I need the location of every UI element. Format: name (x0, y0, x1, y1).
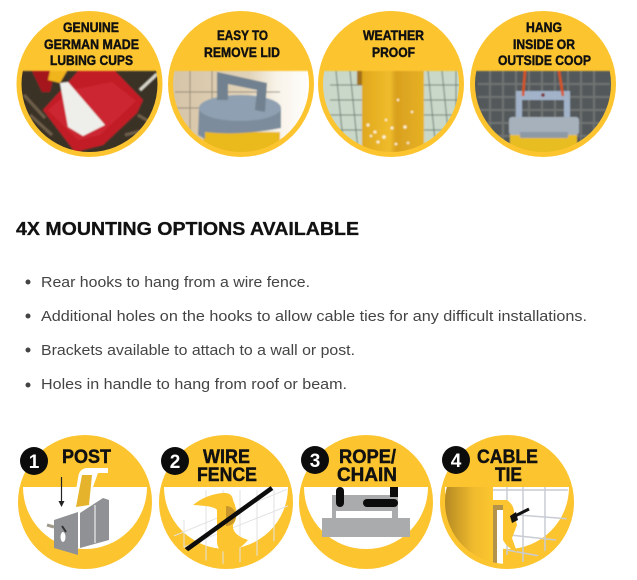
label: hang inside or outside coop: INSIDE OR (513, 37, 575, 52)
panel: feature weather proof (318, 11, 464, 157)
label: easy to remove lid (204, 28, 280, 60)
number badge 1: 1 (29, 452, 40, 473)
label: genuine German made lubing cups: GENUINE (63, 20, 119, 35)
label: weather proof (363, 28, 424, 60)
panel: mounting option 4 cable tie (440, 435, 574, 572)
icon: hook on wire fence (174, 486, 288, 564)
icon: hook sliding onto bracket (47, 468, 109, 555)
photo: red lubing cup (22, 70, 158, 152)
panel: mounting option 3 rope or chain (299, 435, 433, 569)
photo: wet yellow post against mesh (320, 71, 462, 156)
number badge 4: 4 (451, 451, 462, 472)
label: cable tie: CABLE (477, 447, 538, 468)
label: wire fence: WIRE (203, 447, 250, 468)
label: rope / chain (337, 447, 397, 486)
label: post: POST (62, 447, 111, 468)
label: cable tie (477, 447, 538, 486)
label: genuine German made lubing cups (44, 20, 139, 68)
panel: mounting option 1 post (18, 435, 152, 569)
photo: feeder hanging by orange rope (472, 71, 614, 156)
label: easy to remove lid: REMOVE LID (204, 45, 280, 60)
label: genuine German made lubing cups: LUBING CUPS (50, 53, 133, 68)
label: wire fence (197, 447, 257, 486)
photo: grey lid with handle (170, 71, 312, 156)
label: rope / chain: ROPE/ (339, 447, 397, 468)
label: easy to remove lid: EASY TO (217, 28, 268, 43)
label: hang inside or outside coop: OUTSIDE COOP (498, 53, 591, 68)
bullet list: mounting details: Additional holes on the hooks to allow cable ties for any difficult installations. (41, 309, 587, 325)
label: cable tie: TIE (495, 465, 522, 486)
label: weather proof: PROOF (372, 45, 415, 60)
bullet list: mounting details: Rear hooks to hang from a wire fence. (41, 275, 310, 291)
label: hang inside or outside coop: HANG (526, 20, 562, 35)
label: wire fence: FENCE (197, 465, 257, 486)
label: weather proof: WEATHER (363, 28, 424, 43)
bullet list: mounting details: Brackets available to attach to a wall or post. (41, 343, 355, 359)
label: genuine German made lubing cups: GERMAN MADE (44, 37, 139, 52)
label: rope / chain: CHAIN (337, 465, 397, 486)
panel: feature hang inside or outside coop (470, 11, 616, 157)
panel: feature easy to remove lid (168, 11, 314, 157)
icon: down arrow (58, 477, 64, 507)
panel: feature genuine German made lubing cups (15, 11, 165, 157)
icon: handle with rope and chain (322, 487, 410, 537)
panel: mounting option 2 wire fence (159, 435, 293, 570)
bullet list: mounting details: Holes in handle to hang from roof or beam. (41, 377, 347, 393)
icon: feeder hook with cable tie on fence (445, 487, 568, 564)
label: hang inside or outside coop (498, 20, 591, 68)
number badge 3: 3 (310, 451, 320, 472)
number badge 2: 2 (170, 452, 180, 473)
heading: mounting options: 4X MOUNTING OPTIONS AVAILABLE (16, 219, 359, 239)
bullet list: mounting details (26, 275, 587, 393)
